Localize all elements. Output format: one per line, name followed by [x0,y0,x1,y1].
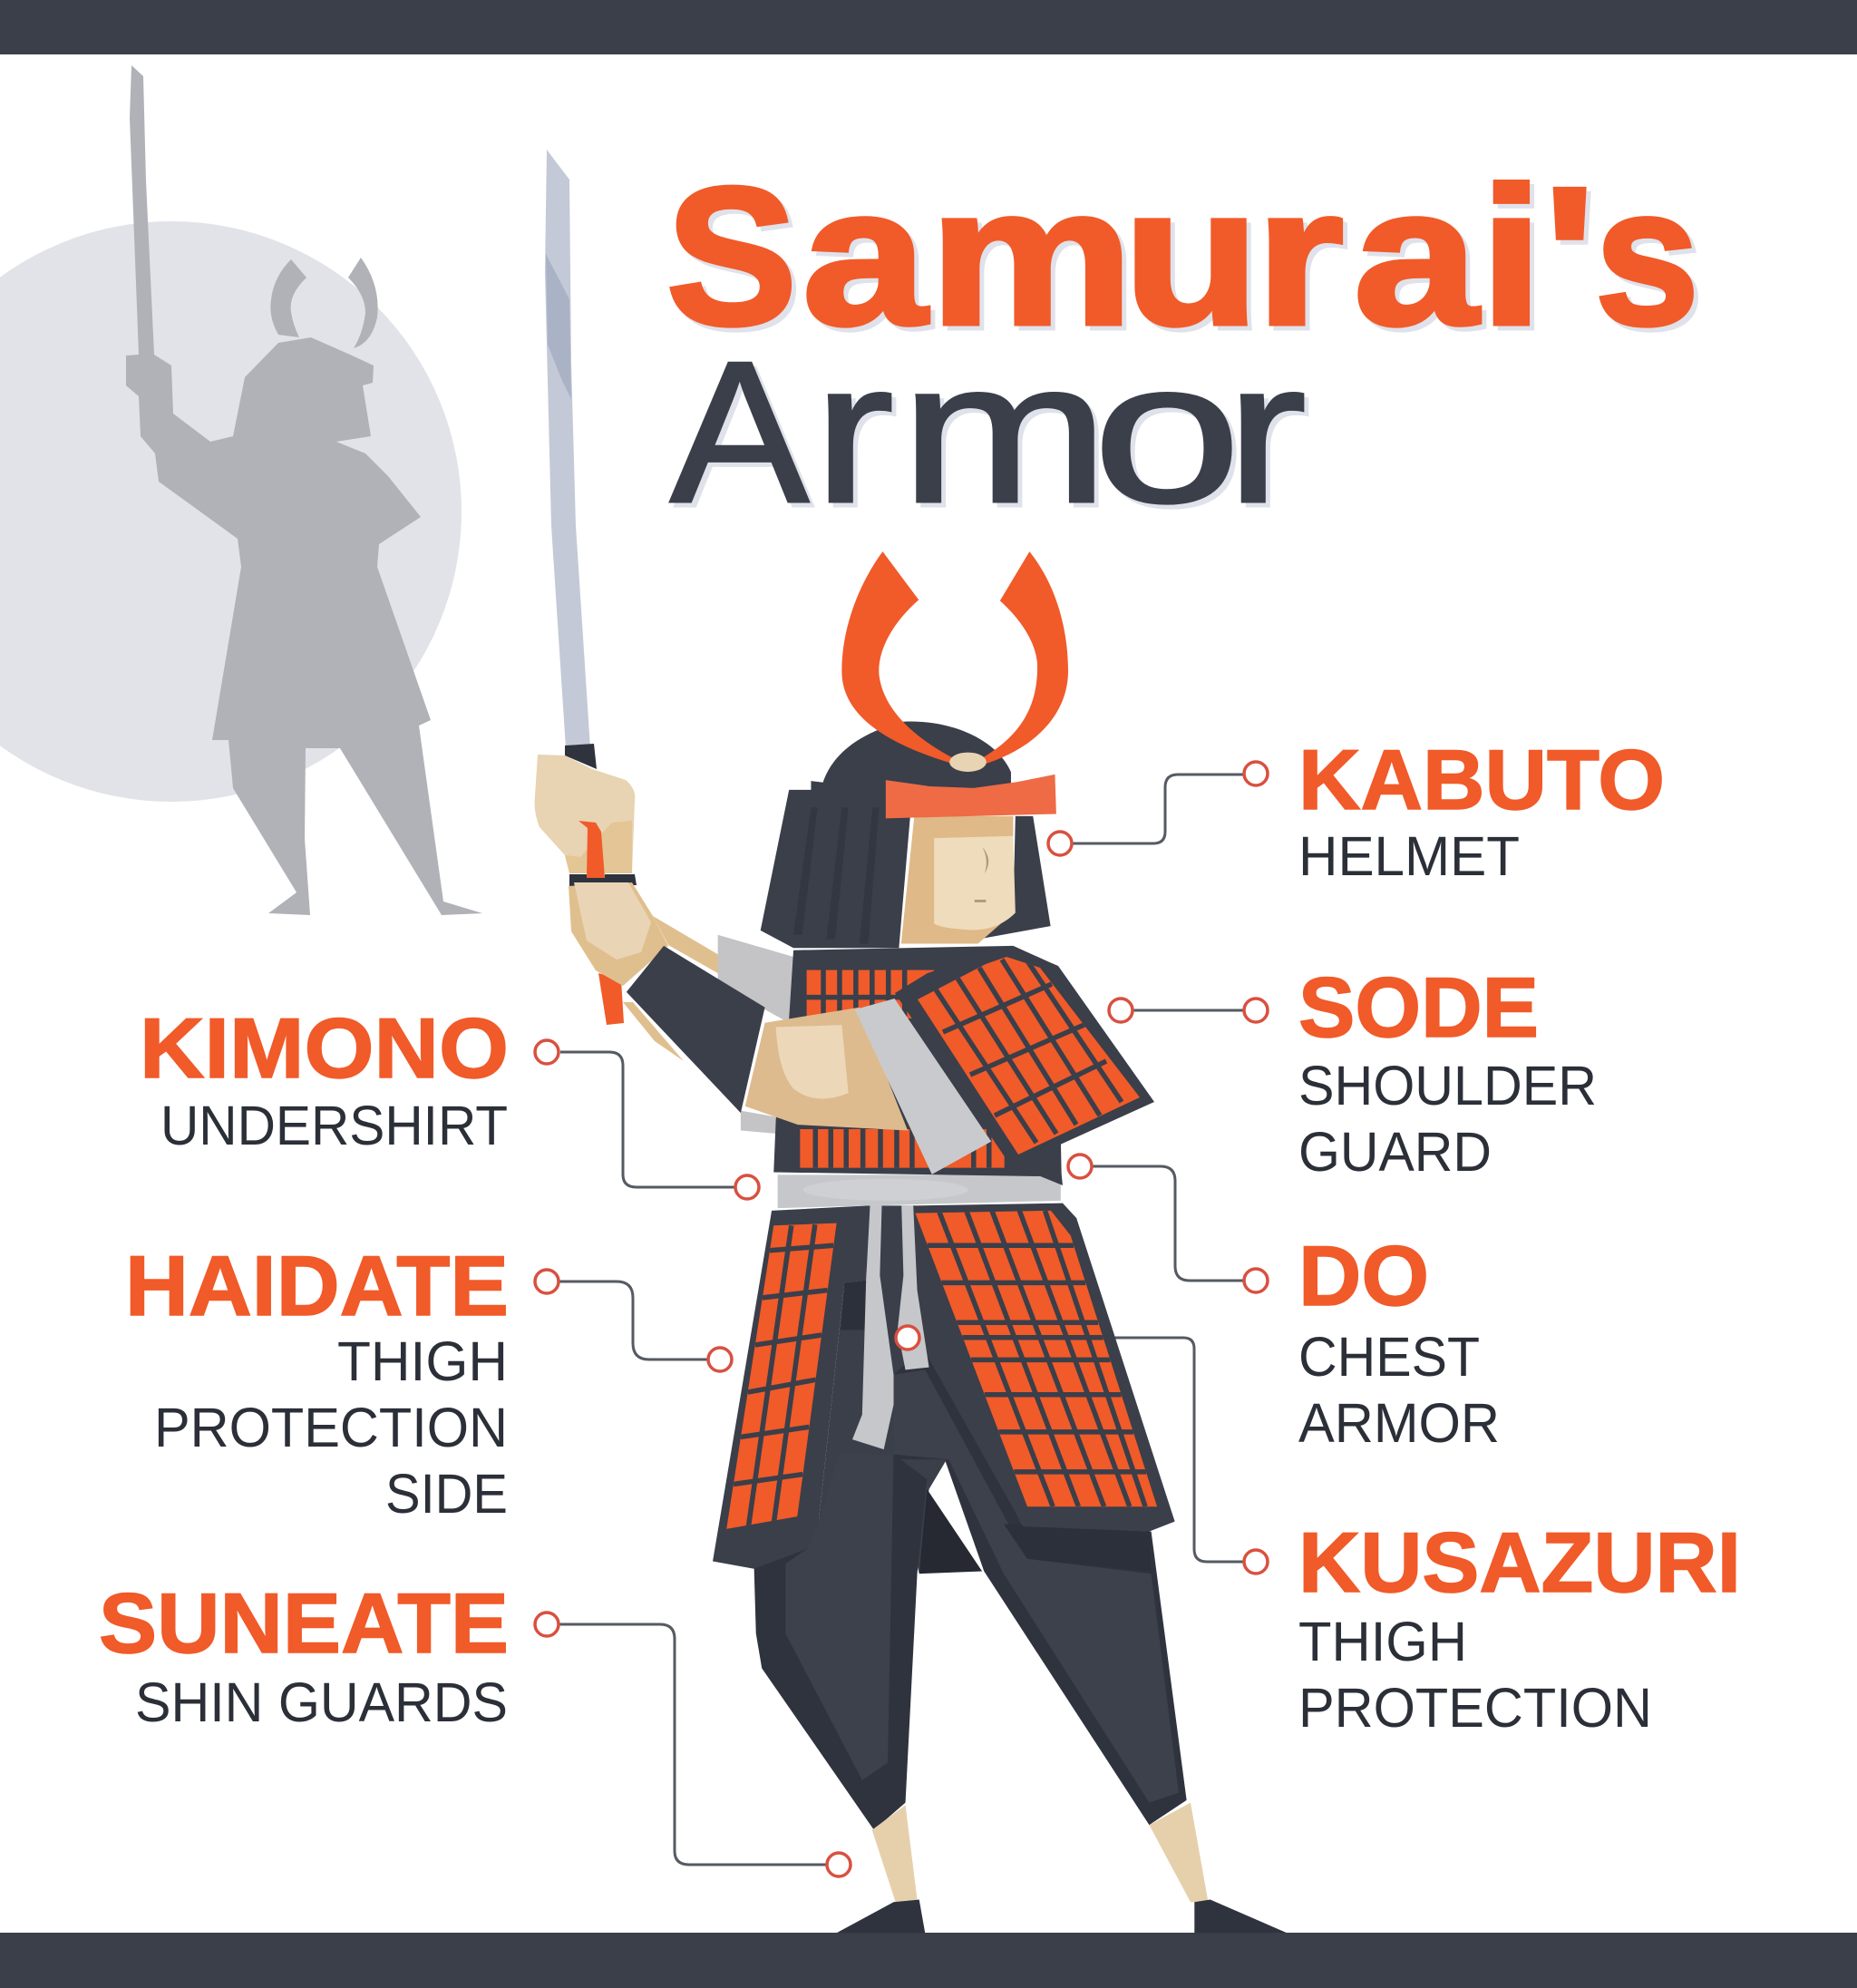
title: r [813,320,894,545]
grey sleeve [718,935,793,1023]
label: haidate: PROTECTION [154,1397,508,1458]
raised arm and hand [535,744,721,1061]
samurai figure [535,150,1287,1933]
title: m [905,325,1113,550]
crotch shadow [919,1489,982,1574]
title: s [1595,146,1699,365]
title: m [934,151,1138,370]
label: do: ARMOR [1298,1392,1500,1454]
pelvis [819,1205,947,1574]
label: haidate: THIGH [337,1330,508,1392]
label: do: DO [1298,1228,1429,1323]
connector lines [559,775,1244,1865]
hilt [565,744,597,769]
left tasset [713,1205,868,1569]
label: kabuto: KABUTO [1298,732,1665,827]
label: kusazuri: PROTECTION [1298,1677,1652,1739]
right leg [894,1345,1187,1825]
title: ' [1544,146,1595,365]
label: haidate: HAIDATE [125,1238,509,1333]
crest horns [841,551,1068,765]
shoes and shins [837,1803,1287,1933]
title: a [807,151,933,370]
sode shoulder guard [895,946,1154,1185]
label: kusazuri: THIGH [1298,1611,1467,1672]
title: A [675,325,813,550]
lower body [713,1174,1287,1933]
label: kimono [140,1000,509,1156]
title: m [929,146,1133,365]
top bar [0,0,1857,54]
upper body [627,935,1062,1176]
title: a [1354,146,1480,365]
upper arm [745,1008,908,1130]
title: S [671,151,802,370]
title: i [1484,151,1548,370]
connector dots [535,762,1268,1876]
label: sode: GUARD [1298,1121,1492,1183]
title: o [1097,325,1246,550]
title: r [1230,325,1311,550]
title: a [802,146,928,365]
belt [778,1174,1061,1208]
label: haidate [125,1238,509,1525]
label: sode [1298,960,1597,1183]
label: suneate [99,1575,509,1733]
label: kusazuri: KUSAZURI [1298,1515,1741,1610]
grey collar [855,999,991,1174]
label: haidate: SIDE [385,1463,508,1525]
wrist [569,882,668,986]
label: suneate: SHIN GUARDS [135,1671,508,1733]
label: suneate: SUNEATE [99,1575,509,1671]
label: kimono: KIMONO [140,1000,509,1096]
sword strap [578,821,605,878]
samurai silhouette [126,65,482,915]
title: r [1260,151,1348,370]
title: i [1480,146,1543,365]
visor [886,775,1056,818]
right tasset [913,1204,1175,1532]
title: r [1256,146,1344,365]
label: kabuto: HELMET [1298,825,1520,887]
under-tasset shadow [1004,1524,1152,1572]
title: S [666,146,797,365]
bottom bar [0,1933,1857,1988]
label: sode: SHOULDER [1298,1055,1597,1116]
lower hilt wrap [598,973,624,1025]
title: u [1128,151,1264,370]
label: kimono: UNDERSHIRT [160,1095,508,1156]
title: u [1123,146,1259,365]
left leg [754,1455,927,1830]
title: ' [1549,151,1599,370]
title: a [1358,151,1484,370]
label: sode: SODE [1298,960,1539,1055]
label: do [1298,1228,1500,1454]
label: kabuto [1298,732,1665,887]
neck guard ribs [793,807,880,943]
title [666,146,1704,550]
sleeve [627,946,765,1113]
title: r [1226,320,1307,545]
label: kusazuri [1298,1515,1741,1739]
forearm [653,916,721,975]
fist [535,755,635,873]
sword blade [545,150,590,748]
title: r [818,325,899,550]
title: o [1093,320,1241,545]
title: s [1599,151,1704,370]
label: do: CHEST [1298,1326,1480,1388]
torso [773,946,1062,1176]
face [901,816,1013,943]
title: m [900,320,1109,545]
helmet [761,551,1068,948]
background circle [0,221,462,802]
title: A [670,320,809,545]
belt ties [852,1205,929,1449]
